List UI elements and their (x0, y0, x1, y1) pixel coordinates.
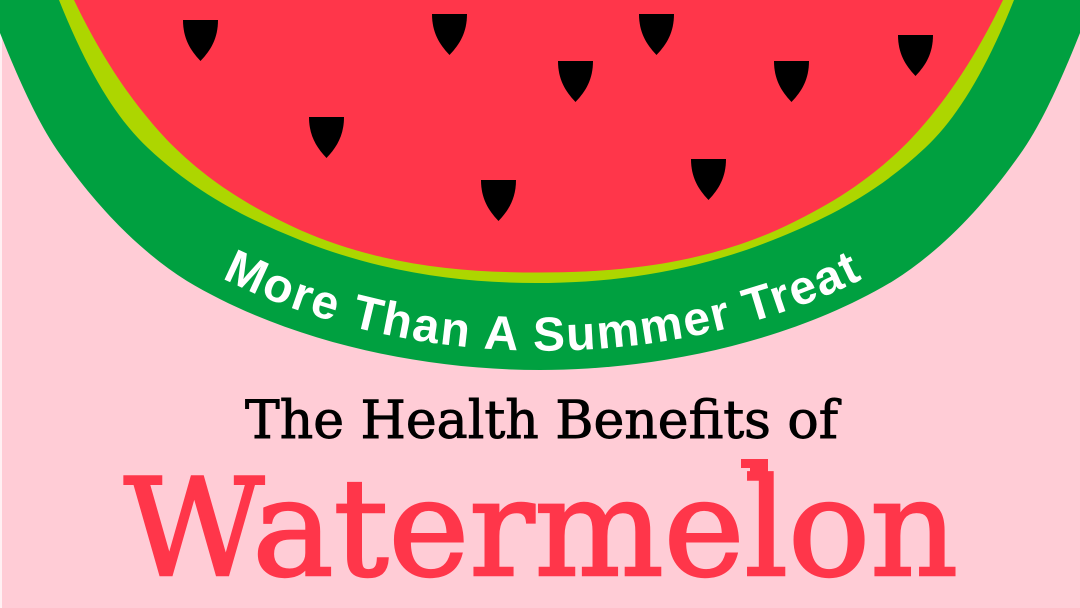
heading: watermelon: Watermelon (124, 450, 958, 607)
rind: green (0, 0, 1080, 370)
heading: the health benefits of: The Health Benefits of (245, 391, 842, 451)
watermelon slice (0, 0, 1080, 370)
curved tagline: More Than A Summer Treat (224, 250, 862, 352)
rind: lime band (45, 0, 1028, 283)
flesh: red (60, 0, 1017, 272)
seeds (183, 14, 933, 221)
